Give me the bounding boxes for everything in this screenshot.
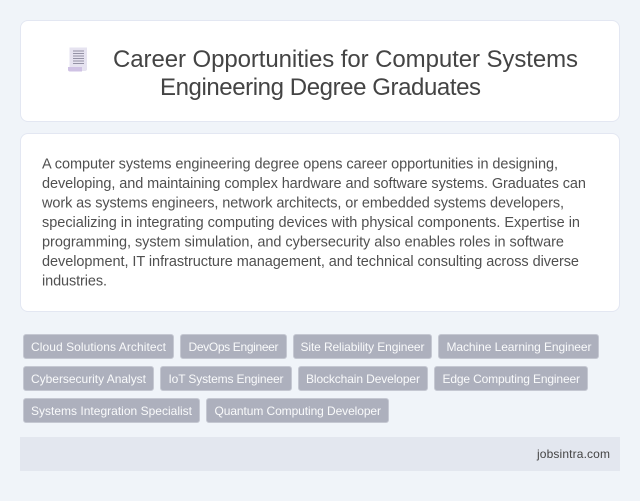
description text: A computer systems engineering degree opens career opportunities in designing, [42, 156, 558, 172]
panel: description card [20, 133, 620, 312]
tag: Cybersecurity Analyst [23, 366, 154, 391]
title [113, 46, 578, 101]
description text: programming, system simulation, and cybersecurity also enables roles in software [42, 234, 564, 250]
panel: career tags [23, 334, 599, 423]
tag labels: Blockchain Developer [306, 372, 420, 386]
tag labels: DevOps Engineer [188, 340, 278, 354]
footer source text: jobsintra.com [536, 447, 610, 461]
tag labels [31, 340, 592, 418]
tag labels: Quantum Computing Developer [214, 404, 381, 418]
tag: Edge Computing Engineer [434, 366, 588, 391]
icon: paper scroll [68, 48, 87, 72]
tag: Quantum Computing Developer [206, 398, 389, 423]
tag: Site Reliability Engineer [293, 334, 432, 359]
tag: Blockchain Developer [298, 366, 428, 391]
footer bar [20, 437, 620, 471]
description text [41, 156, 586, 290]
tag labels: Machine Learning Engineer [446, 340, 592, 354]
description text: work as systems engineers, network architects, or embedded systems developers, [41, 196, 564, 212]
tag: DevOps Engineer [180, 334, 287, 359]
tag labels: Edge Computing Engineer [442, 372, 580, 386]
description text: industries. [42, 274, 107, 290]
tag labels: Systems Integration Specialist [31, 404, 193, 418]
tag labels: Cybersecurity Analyst [31, 372, 147, 386]
tag labels: IoT Systems Engineer [168, 372, 284, 386]
tag labels: Cloud Solutions Architect [31, 340, 167, 354]
tag labels: Site Reliability Engineer [300, 340, 424, 354]
title: Engineering Degree Graduates [160, 74, 481, 101]
panel: title card [20, 20, 620, 122]
title: Career Opportunities for Computer Systems [113, 46, 578, 73]
description text: specializing in integrating computing devices with physical components. Expertise in [42, 215, 580, 231]
tag: Cloud Solutions Architect [23, 334, 174, 359]
description text: developing, and maintaining complex hardware and software systems. Graduates can [42, 176, 586, 192]
tag: Systems Integration Specialist [23, 398, 200, 423]
description text: development, IT infrastructure management, and technical consulting across diverse [42, 254, 579, 270]
tag: IoT Systems Engineer [160, 366, 292, 391]
tag: Machine Learning Engineer [438, 334, 599, 359]
